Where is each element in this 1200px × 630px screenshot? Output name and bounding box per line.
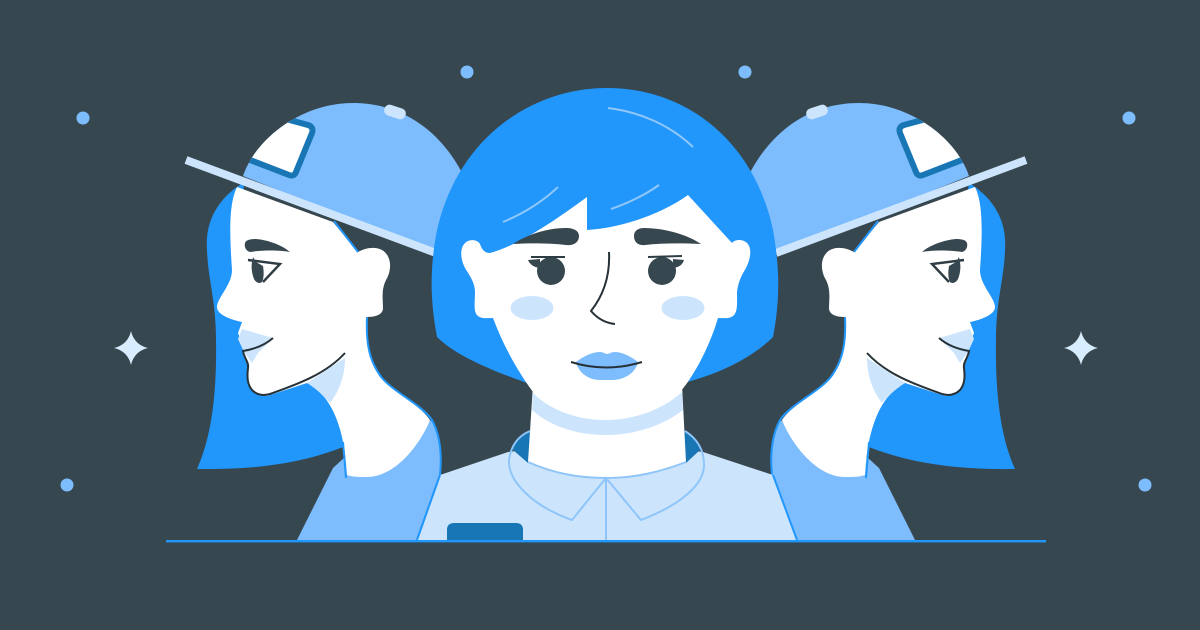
center figure left brow [513, 228, 579, 245]
center figure nose [591, 252, 615, 324]
center figure fringe highlights [503, 108, 693, 222]
left figure shoulder [297, 420, 441, 540]
illustration: three portraits [60, 66, 1152, 542]
center front-facing figure [417, 88, 797, 540]
left figure face and neck [217, 187, 430, 477]
center figure shirt [417, 440, 797, 540]
right profile figure [742, 103, 1026, 540]
left figure mouth and jaw lines [243, 338, 345, 395]
right figure lip shadow [939, 329, 974, 363]
center figure chin shadow [532, 392, 683, 435]
right figure mouth and jaw lines [867, 338, 969, 395]
right figure neck shadow [867, 358, 905, 403]
ground line [166, 540, 1046, 542]
center figure name badge [447, 523, 523, 540]
right figure cap [742, 103, 1026, 253]
right figure outlines [771, 221, 878, 540]
center figure face [461, 195, 750, 420]
left figure eye [248, 257, 280, 283]
center figure right brow [634, 228, 701, 245]
right figure face and neck [782, 187, 995, 477]
right figure hair [867, 183, 1015, 469]
left figure lip shadow [238, 329, 273, 363]
center figure collar [509, 431, 704, 540]
center figure hair [432, 88, 778, 400]
center figure lips [571, 352, 642, 380]
left profile figure [186, 103, 470, 540]
right figure brow [922, 239, 967, 252]
right figure shoulder [771, 420, 915, 540]
center figure inner collar [513, 431, 700, 463]
center figure shirt outline [417, 475, 797, 540]
center figure right eye [648, 256, 684, 285]
left figure cap [186, 103, 470, 253]
center figure cheeks [510, 296, 704, 320]
left figure neck shadow [307, 358, 345, 403]
right figure eye [932, 257, 964, 283]
center figure left eye [528, 257, 565, 285]
left figure brow [245, 239, 290, 252]
left figure hair [197, 183, 345, 469]
decorative dots and sparkles [60, 66, 1152, 492]
center figure neck [528, 385, 686, 478]
left figure outlines [334, 221, 441, 540]
